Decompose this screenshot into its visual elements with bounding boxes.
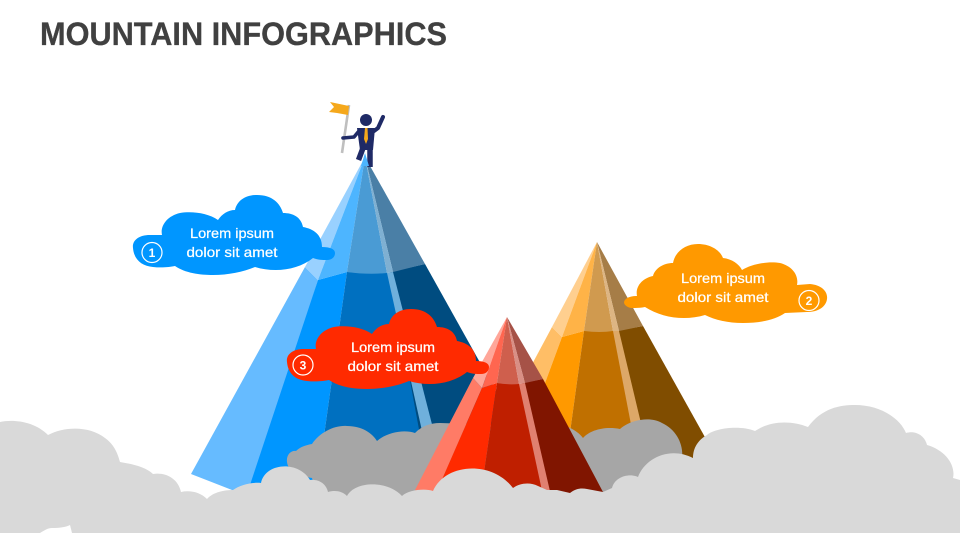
callout 3: red cloud: Lorem ipsum: [351, 339, 435, 355]
red mountain: [415, 317, 603, 500]
icon: businessman with flag: [329, 102, 383, 167]
white gap in cloud: [40, 525, 72, 533]
title: MOUNTAIN INFOGRAPHICS: [40, 16, 447, 52]
orange mountain: [470, 242, 740, 505]
callout 2: orange cloud: 2: [806, 294, 813, 308]
callout 1: blue cloud: [133, 195, 335, 275]
callout 2: orange cloud: Lorem ipsum: [681, 270, 765, 286]
callout 1: blue cloud: Lorem ipsum: [190, 225, 274, 241]
callout 3: red cloud: [287, 309, 489, 389]
callout 1: blue cloud: 1: [149, 246, 156, 260]
callout 3: red cloud: 3: [300, 358, 307, 372]
dark grey cloud: [287, 419, 690, 510]
callout 3: red cloud: dolor sit amet: [348, 358, 439, 374]
light grey cloud foreground: [0, 405, 960, 533]
blue mountain: [191, 157, 540, 500]
callout 1: blue cloud: dolor sit amet: [186, 244, 278, 260]
callout 2: orange cloud: [624, 244, 827, 323]
callout 2: orange cloud: dolor sit amet: [678, 289, 769, 305]
